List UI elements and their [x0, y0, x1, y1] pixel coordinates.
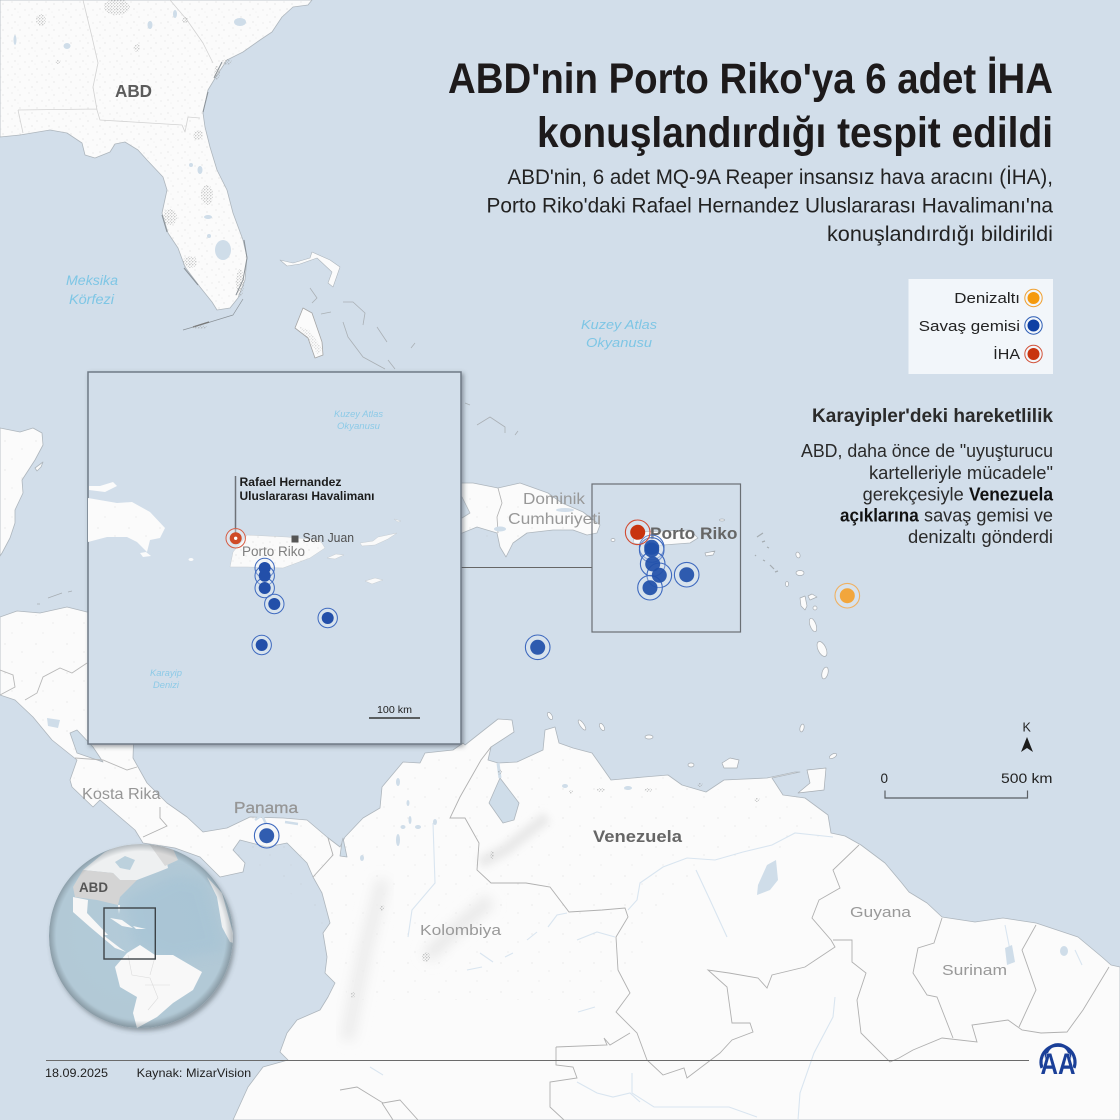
inset: San Juan marker: San Juan	[302, 531, 354, 545]
inset: Kuzey Atlas Okyanusu label	[334, 409, 383, 432]
north arrow: K	[1023, 720, 1032, 734]
side text block: gerekçesiyle	[863, 485, 964, 505]
inset: Puerto Rico	[230, 519, 401, 584]
legend: drone: İHA	[993, 345, 1020, 363]
label: Guyana: Guyana	[850, 904, 912, 921]
inset: scale bar: 100 km	[377, 704, 412, 716]
rivers	[370, 823, 1082, 1120]
scale bar main map	[880, 771, 1052, 798]
inset: drone marker	[226, 529, 245, 548]
label: Surinam: Surinam	[942, 962, 1007, 979]
title	[448, 55, 1053, 157]
inset: airport leader line	[234, 476, 236, 538]
inset: Kuzey Atlas Okyanusu label: Okyanusu	[337, 421, 381, 432]
legend: submarine	[954, 289, 1042, 307]
land: Central America and South America	[0, 607, 1120, 1120]
label: Kuzey Atlas Okyanusu: Okyanusu	[586, 335, 652, 350]
label: Kolombiya: Kolombiya	[420, 922, 502, 939]
footer line	[46, 1060, 1029, 1062]
label: Dominik Cumhuriyeti	[508, 491, 601, 528]
side text block: ABD, daha önce de "uyuşturucu	[801, 441, 1053, 461]
inset: warship markers	[252, 558, 337, 655]
inset: scale bar	[369, 704, 420, 718]
subtitle: ABD'nin, 6 adet MQ-9A Reaper insansız hava aracını (İHA),	[508, 166, 1053, 189]
inset: Kuzey Atlas Okyanusu label: Kuzey Atlas	[334, 409, 383, 420]
borders South America	[143, 747, 1109, 1120]
side heading: Karayipler'deki hareketlilik	[812, 405, 1053, 427]
label: Porto Riko: Porto Riko	[650, 525, 738, 543]
label: Kosta Rika: Kosta Rika	[82, 786, 161, 803]
label: Dominik Cumhuriyeti: Dominik	[523, 491, 586, 508]
legend	[908, 279, 1053, 374]
marker: submarine	[835, 583, 860, 608]
side text block: Venezuela	[969, 485, 1054, 505]
globe: Canada	[83, 842, 168, 880]
north arrow	[1021, 720, 1033, 752]
borders and rivers	[0, 663, 1109, 1120]
side text block: savaş gemisi ve	[924, 506, 1053, 526]
globe locator	[49, 838, 240, 1028]
markers: warships main map	[254, 535, 699, 848]
lakes	[360, 778, 1068, 965]
legend: warship: Savaş gemisi	[919, 319, 1020, 335]
subtitle: Porto Riko'daki Rafael Hernandez Uluslararası Havalimanı'na	[486, 194, 1053, 218]
land: Hispaniola	[450, 483, 600, 557]
land: Bahamas	[280, 252, 518, 435]
AA logo: AA	[1040, 1048, 1076, 1081]
inset map	[88, 372, 461, 744]
globe: Africa	[207, 877, 233, 943]
footer source: Kaynak: MizarVision	[137, 1066, 251, 1080]
inset: Karayip Denizi label	[150, 668, 182, 691]
locator box Puerto Rico	[592, 484, 740, 632]
scale bar main map: 500 km	[1001, 771, 1052, 786]
side text block	[801, 441, 1054, 547]
marker: drone main map	[625, 520, 650, 545]
cities	[351, 769, 760, 998]
legend: drone	[993, 345, 1042, 363]
inset: airport label	[240, 475, 374, 503]
label: Panama: Panama	[234, 800, 298, 817]
globe: ABD label: ABD	[79, 879, 108, 895]
footer date: 18.09.2025	[45, 1066, 108, 1080]
inset: Hispaniola	[88, 482, 194, 561]
globe: Mexico and Central America	[73, 897, 126, 952]
land: Yucatan and Central America north	[0, 428, 72, 604]
title: konuşlandırdığı tespit edildi	[537, 109, 1053, 157]
subtitle: konuşlandırdığı bildirildi	[827, 223, 1053, 246]
globe: locator box	[104, 908, 155, 959]
mountains	[480, 817, 547, 863]
connector line from inset to box	[461, 566, 592, 568]
label: Meksika Körfezi: Meksika	[66, 273, 119, 288]
inset: Karayip Denizi label: Karayip	[150, 668, 182, 679]
globe: South America	[115, 945, 202, 1028]
globe: ocean tints	[135, 884, 214, 951]
globe: Florida and Cuba	[110, 905, 146, 929]
label: Dominik Cumhuriyeti: Cumhuriyeti	[508, 511, 601, 528]
label: Kuzey Atlas Okyanusu: Kuzey Atlas	[581, 317, 658, 332]
legend: submarine: Denizaltı	[954, 291, 1020, 307]
land: USA and Florida	[0, 0, 312, 330]
inset: Porto Riko label: Porto Riko	[242, 544, 305, 559]
label: Meksika Körfezi: Körfezi	[69, 292, 115, 307]
inset: airport label: Uluslararası Havalimanı	[240, 489, 374, 503]
label: ABD: ABD	[115, 81, 152, 101]
subtitle	[486, 166, 1053, 246]
land: Trinidad and Caribbean small islands	[546, 519, 837, 793]
side text block: kartelleriyle mücadele"	[869, 463, 1053, 483]
side text block: açıklarına	[840, 506, 920, 526]
side text block: denizaltı gönderdi	[908, 527, 1053, 547]
label: Meksika Körfezi	[66, 273, 119, 307]
globe: USA	[73, 870, 137, 905]
label: Venezuela: Venezuela	[593, 828, 683, 846]
inset: airport label: Rafael Hernandez	[240, 475, 342, 489]
scale bar main map: 0	[880, 771, 888, 786]
legend: warship	[919, 317, 1042, 335]
land: Puerto Rico main map	[633, 530, 698, 546]
title: ABD'nin Porto Riko'ya 6 adet İHA	[448, 55, 1053, 103]
inset: Karayip Denizi label: Denizi	[153, 680, 180, 691]
borders Central America	[0, 663, 137, 770]
label: Kuzey Atlas Okyanusu	[581, 317, 658, 350]
